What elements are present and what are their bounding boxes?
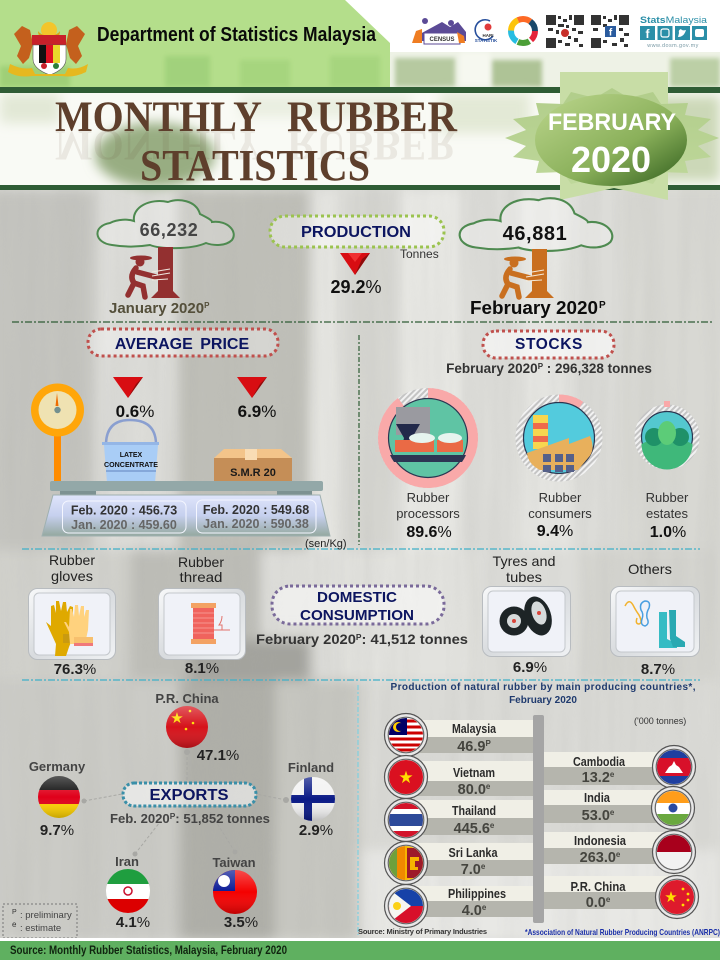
consumption total: P [356,633,362,642]
StatsMalaysia social block: Stats Malaysia [640,15,708,26]
january figure: January 2020 [109,300,204,317]
january figure: 66,232 [140,220,198,240]
StatsMalaysia social block: f [646,27,650,41]
row: Malaysia: Malaysia [452,721,497,736]
domestic consumption label: CONSUMPTION [300,607,414,624]
donut: rubber processors [383,393,473,483]
stock labels: estates: 1.0% [650,524,686,541]
date badge: FEBRUARY [548,109,676,136]
row: Malaysia: P [485,739,491,748]
green title bars [0,87,720,190]
stock labels: processors [396,490,460,541]
heading: Department of Statistics Malaysia: Department of Statistics Malaysia [97,24,377,46]
price unit: (sen/Kg) [305,538,347,550]
consumption total: February 2020 [256,631,351,647]
consumption: rubber gloves: Rubber [49,552,95,568]
panel: production [97,198,612,318]
connector dots [82,749,289,856]
row: Malaysia: 46.9 [457,739,485,755]
percent: gloves: 76.3% [54,661,96,678]
icon: SMR 20 box: S.M.R 20 [230,467,276,479]
consumption total: : 41,512 tonnes [362,631,468,647]
icon: SDG wheel [511,19,535,43]
percent: tyres: 6.9% [513,659,547,676]
scale base with prices: Jan. 2020 : 590.38 [203,517,309,531]
row: Philippines: Philippines [448,886,506,901]
row: Thailand: 445.6 [454,821,490,837]
scale base with prices: Feb. 2020 : 549.68 [203,503,309,517]
exports label: EXPORTS [150,787,229,804]
export: Iran [106,854,150,931]
consumption: tyres and tubes [482,553,570,656]
icon: down arrow [340,253,370,275]
exports total: : 51,852 tonnes [175,812,270,826]
title: Monthly Rubber Statistics [55,94,458,190]
row: Cambodia: Cambodia [573,754,626,769]
row: Sri Lanka [384,842,533,884]
scale base with prices: Jan. 2020 : 459.60 [71,518,177,532]
february figure [460,198,612,318]
consumption: tyres and tubes: Tyres and [492,553,556,569]
stocks label [483,331,614,358]
footer: Source: Monthly Rubber Statistics, Malaysia, February 2020 [10,943,287,957]
icon: scale dial [31,384,84,482]
row: Indonesia: Indonesia [574,833,627,848]
row: Cambodia: 13.2 [582,770,610,786]
export: Iran: 4.1% [116,914,150,931]
export: Finland: 2.9% [299,822,333,839]
row: Thailand [384,798,533,842]
row: Indonesia: e [616,850,621,859]
row: India: 53.0 [582,808,610,824]
february figure: 46,881 [503,223,567,245]
icon: QR code one [546,15,584,48]
title: Monthly Rubber Statistics: MONTHLY [55,94,262,141]
SMR change: 6.9% [238,402,276,421]
export: Taiwan [212,855,258,931]
row: P.R. China [544,876,698,918]
title band background [0,52,720,187]
row: Vietnam [384,756,533,798]
icon: latex bucket [102,420,159,485]
icon: QR code two [591,15,629,48]
stock labels: consumers: Rubber [539,490,582,505]
stock labels: processors: processors [396,506,460,521]
chart title: February 2020 [509,695,577,706]
row: Malaysia [384,714,533,756]
row: India [544,786,694,830]
row: Sri Lanka: 7.0 [461,862,481,878]
february figure: February 2020 [470,298,598,318]
row: Thailand: e [490,821,495,830]
stock labels: estates [646,490,689,541]
stocks total: February 2020 [446,361,538,376]
february figure: P [599,300,606,311]
legend [3,904,77,938]
exports label [123,783,256,806]
icon: statistics day logo: STATISTIK [475,38,498,43]
icon: census logo [412,18,466,44]
legend: e [12,920,17,929]
export: Taiwan: Taiwan [212,855,256,870]
scale base with prices [42,481,330,536]
consumption: tyres and tubes: tubes [506,569,542,585]
title: Monthly Rubber Statistics: STATISTICS [140,141,370,190]
row: Indonesia: 263.0 [580,850,616,866]
icon: latex down arrow [113,377,143,398]
row: Sri Lanka: e [481,862,486,871]
title: Monthly Rubber Statistics: RUBBER [287,94,458,141]
icon: latex bucket: LATEX [120,452,143,459]
chart title [390,682,696,706]
panel: average price [31,329,347,550]
domestic consumption label: DOMESTIC [317,589,397,606]
exports total: Feb. 2020 [110,812,167,826]
section dividers [12,322,712,935]
row: Philippines: e [482,903,487,912]
stocks label: STOCKS [515,336,583,353]
StatsMalaysia social block [640,15,708,49]
consumption: rubber thread: thread [180,569,222,585]
export: Germany [29,759,86,839]
row: P.R. China: e [606,895,611,904]
production label [270,216,444,261]
stock labels: consumers: 9.4% [537,523,573,540]
icon: latex bucket: CONCENTRATE [104,462,158,469]
latex change: 0.6% [116,402,154,421]
row: Vietnam: Vietnam [453,765,495,780]
stock labels: estates: estates [646,506,688,521]
icon: SMR down arrow [237,377,267,398]
export: China: P.R. China [155,691,219,706]
row: Vietnam: 80.0 [458,782,486,798]
export: China: ★ [170,710,184,727]
header white strip [0,0,720,52]
export: Finland: Finland [288,760,334,775]
export: China: 47.1% [197,747,239,764]
title: Monthly Rubber Statistics: MONTHLY [55,121,262,168]
icon: SMR 20 box [214,449,292,483]
consumption: rubber thread [158,554,246,660]
icon: census logo: CENSUS [429,37,455,43]
row: P.R. China: ★ [664,889,678,906]
date badge: 2020 [571,139,651,180]
icon: statistics day logo: HARI [482,33,494,38]
row: Philippines [384,884,533,928]
production label: Tonnes [400,247,439,261]
january figure [97,200,234,317]
consumption: rubber gloves: gloves [51,568,93,584]
row: Philippines: 4.0 [462,903,482,919]
chart title: Production of natural rubber by main producing countries*, [390,682,696,693]
donut: rubber consumers [520,399,598,477]
row: Indonesia [544,830,696,874]
export: China [155,691,239,764]
stock labels: estates: Rubber [646,490,689,505]
percent: others: 8.7% [641,661,675,678]
row: India: India [584,790,611,805]
row: P.R. China: P.R. China [570,879,626,894]
stocks total: : 296,328 tonnes [543,361,652,376]
domestic consumption label [272,586,444,624]
export: Iran: Iran [115,854,139,869]
date badge [505,72,719,200]
legend: P [12,909,17,916]
source note: Source: Ministry of Primary Industries [358,927,487,936]
stock labels: consumers [528,490,592,540]
consumption: rubber thread: Rubber [178,554,224,570]
stock labels: processors: Rubber [407,490,450,505]
production label: PRODUCTION [301,224,411,241]
consumption: others [610,561,700,656]
stocks total: P [538,362,544,371]
header green panel [0,0,390,87]
footer [0,938,720,960]
panel: domestic consumption [28,552,700,678]
chart unit: ('000 tonnes) [634,716,686,726]
row: Sri Lanka: Sri Lanka [448,845,498,860]
icon: statistics day logo [475,20,498,43]
scale base with prices: Feb. 2020 : 456.73 [71,504,177,518]
export: Germany: 9.7% [40,822,74,839]
consumption: others: Others [628,561,672,577]
legend: : preliminary [20,910,72,921]
panel: exports [29,691,335,931]
panel: stocks [383,331,696,541]
percent: thread: 8.1% [185,660,219,677]
StatsMalaysia social block: www.dosm.gov.my [646,43,699,49]
export: Germany: Germany [29,759,86,774]
row: India: e [610,808,615,817]
row: Cambodia: e [610,770,615,779]
row: P.R. China: 0.0 [586,895,606,911]
export: Finland [288,760,335,839]
row: Thailand: Thailand [452,803,496,818]
panel: natural rubber producers [358,682,720,937]
average price label [88,329,278,356]
row: Vietnam: ★ [398,768,414,787]
stock labels: consumers: consumers [528,506,592,521]
average price label: AVERAGE PRICE [115,336,249,353]
exports total: P [170,812,176,821]
january figure: P [204,301,210,310]
center post [533,715,544,923]
connector lines [84,752,286,854]
icon: QR code two: f [609,28,613,38]
icon: coat of arms [8,22,88,76]
production change: 29.2% [330,277,382,297]
donut: rubber estates [638,401,696,470]
export: Taiwan: 3.5% [224,914,258,931]
legend: : estimate [20,923,61,934]
consumption: rubber gloves [28,552,116,660]
title: Monthly Rubber Statistics: RUBBER [287,121,458,168]
row: Cambodia [544,746,696,788]
row: Vietnam: e [486,782,491,791]
stock labels: processors: 89.6% [406,524,452,541]
